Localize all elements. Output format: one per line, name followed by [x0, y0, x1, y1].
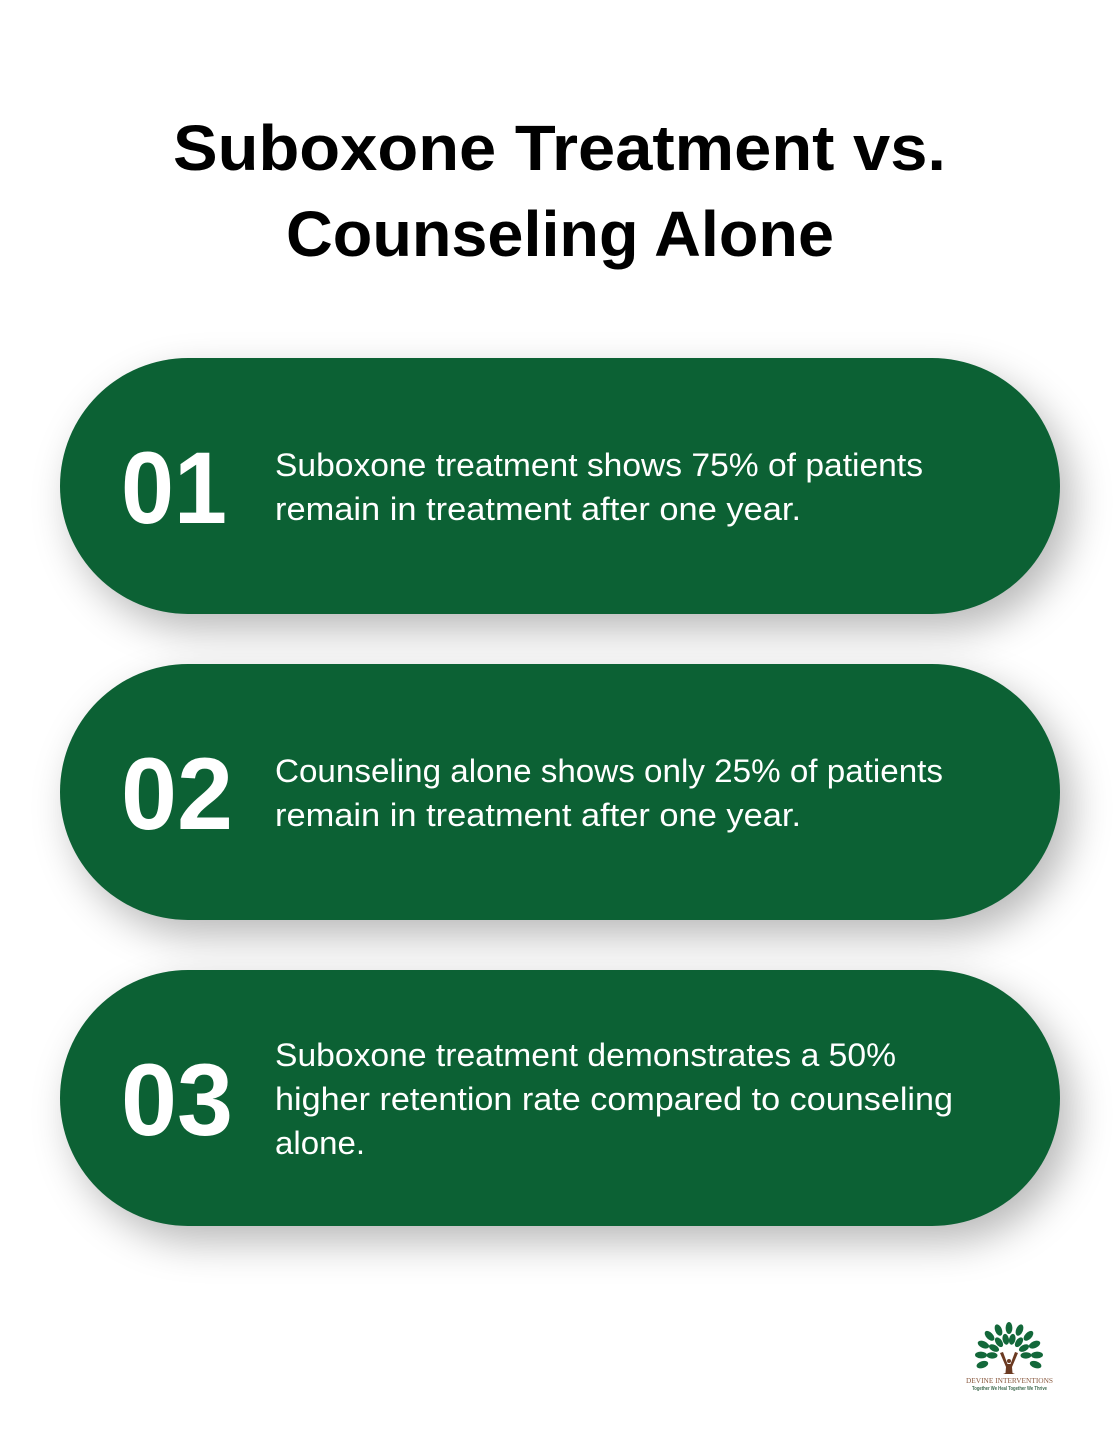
text block: card 03	[275, 1037, 953, 1161]
title	[173, 112, 946, 270]
text block: card 02: remain in treatment after one year.	[275, 797, 801, 833]
text block: card 01: remain in treatment after one year.	[275, 491, 801, 527]
icon: tree leaves	[975, 1322, 1043, 1370]
number 02: 02	[121, 737, 233, 851]
text block: card 01: Suboxone treatment shows 75% of patients	[275, 447, 923, 483]
text block: card 02: Counseling alone shows only 25% of patients	[275, 753, 943, 789]
text block: card 03: Suboxone treatment demonstrates a 50%	[275, 1037, 896, 1073]
panel: card 03 background	[60, 970, 1060, 1226]
text block: card 02	[275, 753, 943, 833]
logo tagline: Together We Heal Together We Thrive	[972, 1386, 1047, 1392]
icon: tree trunk figure	[1000, 1352, 1018, 1374]
text block: card 01	[275, 447, 923, 527]
title: Suboxone Treatment vs.	[173, 112, 946, 184]
logo name: DEVINE INTERVENTIONS	[966, 1376, 1053, 1385]
number 03: 03	[121, 1043, 233, 1157]
text block: card 03: higher retention rate compared to counseling	[275, 1081, 953, 1117]
text block: card 03: alone.	[275, 1125, 365, 1161]
title: Counseling Alone	[286, 198, 834, 270]
number 01: 01	[121, 431, 227, 545]
panel: card 01 background	[60, 358, 1060, 614]
logo: Devine Interventions	[966, 1322, 1053, 1392]
panel: card 02 background	[60, 664, 1060, 920]
